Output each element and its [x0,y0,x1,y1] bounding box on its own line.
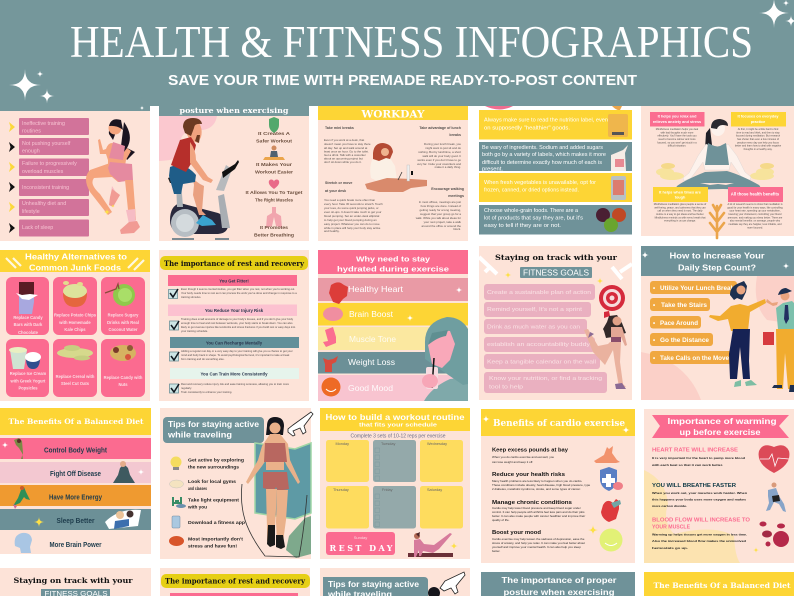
text blocks: doesn't mean you have to stay there [324,142,371,146]
heading [160,256,308,270]
tips list: Download a fitness app [188,520,245,525]
band: whole grain: Choose whole-grain foods. There are a [484,208,579,214]
panel: workout pitfalls [0,100,150,241]
benefits list: It Allows You To Target [246,190,303,195]
heading [326,413,465,428]
benefits list: Better Breathing [254,232,294,238]
callouts: your heart rate, speeding up your metabolism, [730,210,781,213]
callouts: practice [751,120,765,124]
bars and checks: Rest and recovery reduce injury risk and ease training soreness, allowing you to train more [181,382,290,386]
heading: posture when exercising [180,106,289,115]
heading: Healthy Alternatives to [25,252,127,262]
goals list: Create a sustainable plan of action [487,290,591,296]
heading: while traveling [167,430,232,440]
callouts: All those health benefits [731,192,780,196]
text blocks: During your lunch break, you [424,142,461,146]
text sections: this happens your body uses more oxygen and makes [652,498,746,502]
partial panel: rest and recovery, cropped: The importance of rest and recovery [165,576,306,586]
text sections: quality of life. [492,518,510,522]
partial panel: rest and recovery, cropped [160,568,310,596]
callouts: tough [675,196,686,200]
text sections: When you do cardio exercise and eat well, you [492,455,554,459]
band: wary of ingredients: Be wary of ingredients. Sodium and added sugars [482,145,603,151]
bars and checks [168,275,299,394]
schedule cards: Monday [336,442,349,446]
tips list: and classes [188,486,207,491]
panel: benefits of balanced diet [0,408,151,554]
bands: Sleep Better [56,516,95,525]
icons [588,446,623,552]
heading [670,252,764,272]
text sections: BLOOD FLOW WILL INCREASE TO [652,518,751,524]
callouts: practice every day can help you focus [737,141,780,144]
text blocks: Take advantage of lunch [419,126,461,130]
text blocks: You need a quick break more often than [324,198,376,202]
text blocks: easy project. Whatever you can do to move [324,222,380,226]
band: frozen vegetables [479,173,632,202]
callouts: Mindfulness meditation gives people a sense of [654,203,707,206]
text blocks: meetings [448,194,464,198]
heading ribbon: up before exercise [680,428,761,437]
text sections: Keep excess pounds at bay [492,448,569,454]
text blocks: In most offices, meetings are just [419,200,461,204]
bars and checks: You Can Recharge Mentally [206,340,263,346]
bands: Weight Loss [348,357,395,367]
text blocks: very far. Invite your coworkers and [417,162,461,166]
callouts: meditate say they are happier, less irritable, and [728,223,782,226]
text blocks: Even if you work at a desk, that [324,138,364,142]
list: pitfalls [9,118,89,236]
text sections: YOU WILL BREATHE FASTER [652,483,736,489]
heading: Staying on track with your [495,253,618,262]
tips list: stress and have fun! [188,544,237,548]
text sections: It is very important for the heart to pump more blood [652,456,745,460]
text blocks: blood pumping. Set an under-desk elliptical [324,214,380,218]
text sections: better. [492,549,501,553]
partial panel: tips while traveling, cropped: Tips for staying active [328,580,420,589]
panel: benefits of cardio [481,409,635,563]
illustration: man on exercise bike [168,118,239,240]
callouts: focused, so you won't get stuck in a [657,141,697,144]
cards: Bars with Dark [14,322,43,327]
band: wary of ingredients: difficult to determine exactly how much of each is [482,160,602,166]
panel: rest and recovery [159,250,309,401]
tips list: • [653,286,655,292]
goals list: establish an accountability buddy [487,342,590,348]
text blocks: your toes, do some quick jumping jacks, or [324,206,379,210]
bars and checks: You Reduce Your Injury Risk [205,308,264,313]
cards: Replace Cereal with [56,374,95,379]
tips list: • [653,303,655,309]
tips list: • [653,356,655,362]
callouts: lowering your cholesterol, controlling your blood [729,213,782,216]
benefits list: It Makes Your [256,162,292,167]
band: read labels: on supposedly "healthier" goods. [484,126,570,132]
goals list [484,284,607,393]
sparkles [9,0,794,110]
list: pitfalls: Not pushing yourself [22,141,71,147]
callouts: difficult situation. [668,145,687,148]
panel: posture when exercising [159,100,309,241]
rest day card: Sunday [354,535,367,540]
illustration: meditating woman [656,119,774,238]
bars and checks: You Can Train More Consistently [200,372,268,376]
text blocks: at your desk [325,189,346,193]
heading: Tips for staying active [168,420,260,429]
bars and checks: regularly. [181,386,192,390]
text sections: stress of anxiety, and help you relax. It can make you feel better about [492,541,585,545]
tips list: • [653,321,655,327]
benefits list: Workout Easier [255,170,293,174]
cards: Drinks with Real [107,320,139,325]
callouts: At first, it might be a little hard to find [738,128,779,131]
text sections [651,448,751,550]
bars and checks: Train consistently to enhance your training. [181,390,232,394]
band: frozen vegetables: frozen, canned, or dried options instead. [484,188,579,194]
heading: Benefits of cardio exercise [493,418,625,429]
callouts: It focuses on everyday [738,114,779,118]
band: wary of ingredients: present. [482,166,503,172]
heading ribbon [652,415,789,438]
text sections: can lose weight and keep it off. [492,460,533,464]
tips list: Utilize Your Lunch Break [660,286,735,292]
callouts: Mindfulness meditation helps you deal [656,128,699,131]
heading: The importance of rest and recovery [164,259,305,268]
tips list: Get active by exploring [188,458,244,462]
text sections: with each beat so that it can work better. [651,463,723,467]
list: pitfalls: Inconsistent training [22,185,69,191]
text blocks: your next project, take a walk [424,220,462,224]
rest day card [326,532,395,555]
bars and checks: You Get Fitter! [219,278,249,284]
band: read labels: Always make sure to read the nutrition label, even [484,118,608,124]
tips list: Go the Distance [660,338,710,344]
panel: healthy alternatives [0,250,150,401]
bands: Good Mood [348,383,393,393]
partial panel: balanced diet, cropped: The Benefits Of a Balanced Diet [654,581,791,590]
text sections: These conditions include obesity, heart disease, high blood pressure, type [492,483,591,487]
callouts: need to become calmer and more [658,138,696,141]
heading: that fits your schedule [359,422,437,428]
bars and checks: enough time to heal and rest between workouts, your body starts to break down. You can also [181,321,293,325]
callouts: better and learn how to deal with negative [735,145,782,148]
partial panel: proper posture, cropped: The importance of proper [502,575,617,585]
text blocks: around the office or around the [422,224,461,228]
text blocks: nothing. But by lunchtime, a short [418,150,461,154]
text sections: Also the increased blood flow makes the uninvolved [652,539,746,543]
callouts: has shown that even a few minutes of [737,138,779,141]
bars and checks: Even though it seems counterintuitive, you get fitter when you rest, not when you're working out. [181,287,295,291]
benefits list: It Promotes [260,225,288,230]
bars and checks: Adding a regular rest day or a very easy day to your training will give you a chance to get your [181,349,293,353]
partial panel: balanced diet, cropped [644,572,794,596]
text sections [492,448,591,553]
callouts: well-being, peace, and calmness that they can [654,206,706,209]
tips list [650,281,737,364]
heading ribbon: Importance of warming [668,417,776,426]
callouts: effectively. You'll have the tools you [657,135,697,138]
heading [163,417,264,443]
text blocks: Stretch or move [325,181,352,185]
cards: Replace Sugary [108,312,139,318]
cards: Kale Chips [64,327,86,332]
list: pitfalls: lifestyle [22,209,40,215]
band: wary of ingredients [479,142,632,172]
rest day card: REST DAY [330,543,393,553]
bars and checks: mind and body back in shape. To avoid psychological burnout, it's important to take a break [181,353,290,357]
heading: hydrated during exercise [337,264,449,274]
callouts: call on when they need it most. The daily [657,210,703,213]
text blocks: suggest that your group go for a [420,212,461,216]
text blocks: walk will do your body good. It [422,154,461,158]
tips list [169,456,245,548]
callouts: everything in us can change. [664,220,696,223]
text blocks: breaks [449,133,461,137]
cards: Coconut Water [109,327,138,332]
text blocks: might want to just sit and do [425,146,461,150]
partial panel: proper posture, cropped [481,572,635,596]
icons [753,445,789,553]
callouts: thoughts in a healthy way. [744,148,773,151]
bands [0,438,151,553]
tips list: Look for local gyms [188,479,236,484]
callouts: It helps you relax and [658,114,697,118]
cards: Replace Potato Chips [54,312,97,318]
bars and checks: Your body needs time to rest as it can process the work you've done and change in response to a [181,291,297,295]
benefits list: It Creates A [258,131,291,136]
text blocks: how things are done. Instead of [421,204,461,208]
cards: Replace Candy [13,315,43,320]
text blocks: block. [453,227,461,231]
cards: Popsicles [18,386,38,390]
bands: Control Body Weight [44,446,107,454]
subtitle: SAVE YOUR TIME WITH PREMADE READY-TO-POST CONTENT [168,72,637,89]
icon: target [599,285,625,318]
panel: workday [318,106,468,241]
bands: Have More Energy [49,492,103,502]
panel: stay hydrated [318,250,468,401]
partial panel: staying on track, cropped [0,568,151,596]
partial panel: staying on track, cropped: Staying on track with your [14,576,133,585]
heading: Common Junk Foods [29,264,122,272]
illustration: woman at desk [365,143,427,192]
text blocks: don't sit down while you do it. [324,160,362,164]
tips list: Take Calls on the Move [660,356,730,362]
callouts: focused during meditation. But research [736,135,781,138]
heading: Daily Step Count? [678,264,756,272]
bands: Fight Off Disease [50,469,101,478]
callouts: more focused. [747,226,763,229]
schedule cards: Friday [382,488,393,492]
panel: nutrition label tips [479,106,632,234]
banner [0,0,794,106]
schedule cards [326,440,463,528]
text sections: Warming up helps tissues get more oxygen in less time. [652,532,747,536]
text sections: better. It can also make people with cancer healthier and improve their [492,514,585,518]
list: pitfalls: overload muscles [22,169,64,175]
heading: How to Increase Your [670,252,764,260]
text sections: Cardio exercise may help lessen the sadness of depression, ease the [492,537,585,541]
text blocks [324,126,464,233]
text sections: hemostats go up. [652,546,688,550]
cards: Chocolate [18,330,39,335]
icon: airplane [288,412,313,436]
goals list: Remind yourself, It's not a sprint [487,307,583,313]
goals list: Know your nutrition, or find a tracking [489,376,602,382]
bars and checks: your training schedule. [181,329,208,333]
text blocks: Get a drink. Talk with a coworker [324,153,366,157]
panel: increase daily step count [641,246,794,400]
band: wary of ingredients: both go by a variety of labels, which makes it more [482,152,606,158]
panel: mindfulness meditation [641,106,794,238]
callouts: Mindfulness reminds us with every breath that [655,216,706,219]
bars and checks: training stimulus. [181,295,201,299]
benefits list: The Right Muscles [255,198,293,202]
goals list: Drink as much water as you can [487,324,580,330]
cards: Nuts [118,382,128,387]
illustration: two people talking [709,281,794,392]
bars and checks: from training and do something else. [181,357,225,361]
text blocks: make it a daily thing. [435,165,461,169]
text blocks: while in place will help your body stay active [324,226,381,230]
text blocks: and healthy. [324,229,340,233]
text sections: more carbon dioxide. [652,504,687,508]
callouts [650,112,786,229]
callouts: also mental benefits: on average, people who [730,220,781,223]
text sections: 2 diabetes, metabolic syndrome, stroke, and some types of cancer. [492,487,581,491]
illustration: running woman [86,119,140,234]
text sections: Many health problems are less likely to happen when you do cardio. [492,479,582,483]
text sections: Boost your mood [492,530,542,536]
bands: More Brain Power [50,540,102,549]
text sections: yourself and improve your mental health. It can also help you sleep [492,545,581,549]
partial panel: tips while traveling, cropped [320,568,470,596]
text blocks: every hour. Take 30 seconds to stretch. Touch [324,202,383,206]
text blocks: to help get your blood pumping during an [324,218,377,222]
cards [6,277,145,397]
cards: Replace Candy with [104,375,143,380]
label: FITNESS GOALS [523,268,589,278]
callouts: pressure, and making you sleep better. There are [728,216,783,219]
heading: How to build a workout routine [326,413,465,422]
tips list: Most importantly don't [188,536,243,542]
tips list: • [653,338,655,344]
bands: Brain Boost [349,309,394,319]
text sections: YOUR MUSCLE [652,524,690,530]
text blocks: getting ready for a long meeting, [420,208,461,212]
callouts: It helps when times are [659,190,701,194]
heading [337,254,449,274]
heading: Why need to stay [356,254,431,264]
goals list: Keep a tangible calendar on the wall [487,360,596,366]
cards: with Greek Yogurt [10,378,46,384]
cards: with Homemade [58,320,91,325]
band: read labels [479,110,632,140]
text sections: Cardio may help lower blood pressure and keep blood sugar under [492,506,581,510]
callouts: A lot of research seems to show that meditation is [727,203,783,206]
callouts: with bad thoughts much more [661,131,694,134]
schedule cards: Wednesday [427,442,447,446]
text sections: Reduce your health risks [492,472,565,478]
panel: tips staying active while traveling [160,408,313,559]
schedule cards: Tuesday [381,442,396,446]
text sections: control. It can help people with arthritis feel less pain and do their jobs [492,510,585,514]
text blocks: even sit-ups. It doesn't take much to get your [324,210,381,214]
bands [318,278,468,401]
callouts: routine is a way to get ideas and feel better. [656,213,704,216]
band: frozen vegetables: When fresh vegetables is unavailable, opt for [484,180,596,186]
text sections: Manage chronic conditions [492,500,572,506]
tips list: Take light equipment [188,498,239,502]
text blocks: all day. Set up and walk around at [324,146,368,150]
panel: warming up before exercise [644,409,794,563]
band: whole grain: lot of products that say they are, but it's [484,216,583,222]
list: pitfalls: Failure to progressively [22,161,77,167]
benefits list: Safer Workout [256,138,292,144]
callouts: good for your health in many ways, like controlling [727,206,783,209]
illustration: stretching woman [584,315,627,389]
illustration: girl drinking bubble tea [422,317,468,401]
band: whole grain: easy to tell if they are or not. [484,223,561,229]
benefits list [246,117,303,238]
heading: WORKDAY [360,110,425,120]
goals list: tool to help [489,384,523,390]
cards: Steel Cut Oats [61,381,90,386]
list: pitfalls: routines [22,128,41,134]
subtitle: Complete 3 sets of 10-12 reps per exercise [350,434,446,440]
text sections: HEART RATE WILL INCREASE [652,448,738,454]
list: pitfalls: enough [22,148,40,154]
callouts: relieves anxiety and stress [653,120,701,124]
text sections: When you work out, your muscles work harder. When [652,491,747,495]
bars and checks: Training does small amounts of damage to your body's tissues, and if you don't give your body [181,317,294,321]
bars and checks: likely to get overuse injuries like tendonitis and stress fractures if you build rest or easy days into [181,325,296,329]
bands: Muscle Tone [349,334,396,344]
text blocks: Encourage walking [431,187,464,191]
text blocks: Take mini breaks [325,126,354,130]
panel: staying on track with fitness goals [479,246,632,400]
text blocks: walk. While you talk about ideas for [416,216,461,220]
list: pitfalls: Ineffective training [22,121,65,127]
list: pitfalls: Unhealthy diet and [22,201,66,207]
map and suitcase [255,443,311,558]
text blocks: works even if you don't have to go [417,158,461,162]
tips list: Take the Stairs [661,303,708,309]
text blocks: least once an hour. Go to the toilet. [324,150,369,154]
illustration: woman jumping rope [241,417,307,557]
heading: The Benefits Of a Balanced Diet [8,417,144,426]
tips list: with you [187,504,207,510]
heading [25,252,127,272]
bands: Healthy Heart [348,284,404,294]
list: pitfalls: Lack of sleep [22,225,53,231]
schedule cards: Saturday [427,488,442,492]
panel: workout routine [320,408,470,559]
schedule cards: Thursday [333,488,349,492]
band: whole grain [479,205,632,234]
tips list: the new surroundings [188,464,239,470]
callouts: time to read and think, and then to stay [736,131,780,134]
cards: Replace Ice Cream [10,371,47,376]
text blocks: about an upcoming project but [324,156,363,160]
tips list: Pace Around [660,321,698,327]
illustration: yoga pose [408,532,458,557]
